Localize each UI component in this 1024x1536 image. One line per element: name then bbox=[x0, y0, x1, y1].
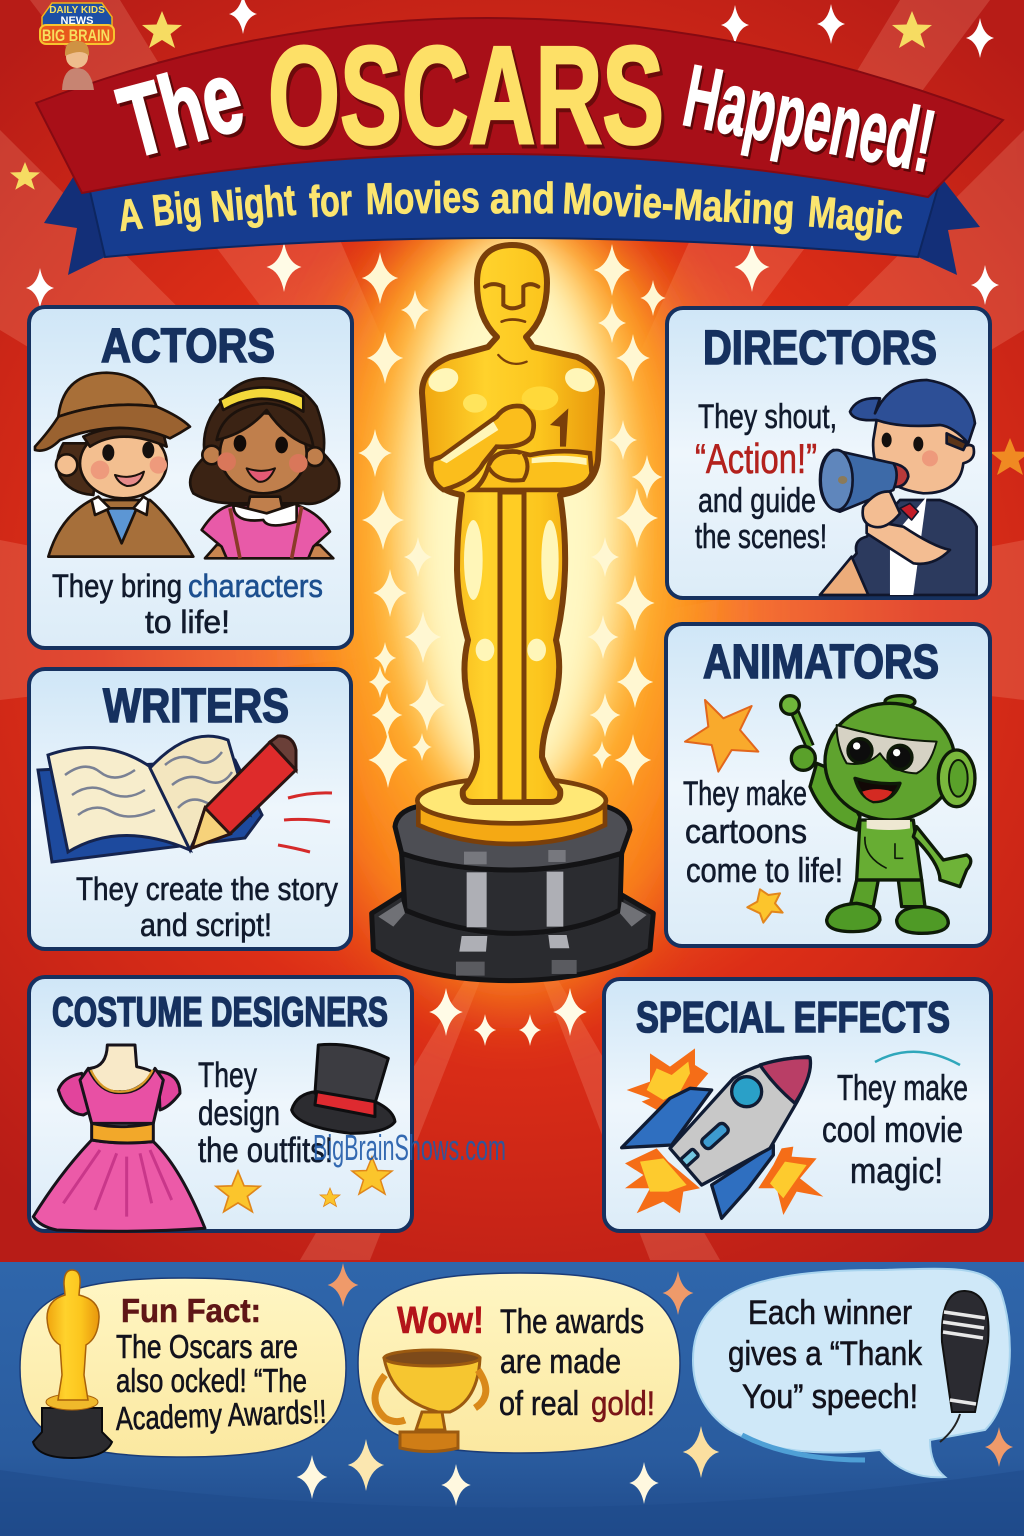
caption: They make bbox=[837, 1067, 968, 1108]
callout: fun fact: also ocked! “The bbox=[116, 1362, 307, 1399]
text: You” speech! bbox=[742, 1378, 918, 1416]
logo: Daily Kids News with Big Brain: NEWS bbox=[60, 15, 94, 27]
decorative stars bbox=[10, 0, 1024, 475]
icon: gold trophy bbox=[375, 1350, 486, 1452]
icon: boy with hat bbox=[35, 373, 193, 557]
icon: microphone bbox=[940, 1291, 989, 1442]
subtitle: Magic bbox=[806, 187, 905, 244]
heading: COSTUME DESIGNERS bbox=[52, 988, 388, 1035]
title banner ribbons bbox=[36, 18, 1003, 275]
panel: animators bbox=[666, 624, 990, 946]
title text: The bbox=[109, 40, 254, 179]
logo: Daily Kids News with Big Brain bbox=[40, 3, 114, 90]
sword bbox=[500, 492, 524, 802]
callout: wow: gold! bbox=[591, 1385, 655, 1423]
text: gives a “Thank bbox=[728, 1335, 923, 1373]
panel: directors bbox=[667, 308, 990, 598]
blue subtitle ribbon bbox=[44, 148, 980, 275]
panel: special effects bbox=[604, 979, 991, 1231]
subtitle: Night bbox=[209, 176, 298, 232]
caption: They bbox=[198, 1056, 257, 1095]
caption bbox=[822, 1067, 968, 1191]
bottom band bbox=[0, 1262, 1024, 1536]
title text bbox=[109, 18, 945, 194]
icon: stars bbox=[685, 700, 783, 923]
caption: and script! bbox=[140, 907, 272, 943]
golden glow behind statue bbox=[266, 200, 770, 1046]
caption: They make bbox=[683, 775, 807, 813]
text: Fun Fact: bbox=[121, 1292, 261, 1329]
icon: top hat bbox=[292, 1044, 395, 1133]
caption: and guide bbox=[698, 482, 816, 520]
title text: OSCARS bbox=[271, 22, 667, 177]
icon: director with megaphone bbox=[820, 380, 977, 595]
subtitle: Movie-Making bbox=[561, 174, 796, 235]
panel: actors bbox=[29, 307, 352, 648]
subtitle: and bbox=[490, 174, 555, 223]
text bbox=[728, 1294, 923, 1416]
callout: fun fact bbox=[20, 1270, 346, 1458]
caption: magic! bbox=[850, 1150, 943, 1191]
icon: red pencil bbox=[192, 736, 296, 848]
icon: girl with headband bbox=[190, 378, 339, 558]
caption: “Action!” bbox=[695, 435, 817, 482]
logo: Daily Kids News with Big Brain: BIG BRAIN bbox=[42, 26, 110, 45]
statue base bbox=[372, 807, 653, 981]
panel: writers bbox=[29, 669, 351, 949]
caption: characters bbox=[188, 568, 323, 604]
callout: wow: are made bbox=[500, 1343, 621, 1381]
caption bbox=[695, 398, 837, 556]
caption: They shout, bbox=[698, 398, 837, 436]
heading: WRITERS bbox=[103, 680, 289, 733]
caption bbox=[76, 871, 338, 943]
caption bbox=[683, 775, 843, 890]
caption: to life! bbox=[145, 604, 230, 640]
title text: OSCARS bbox=[268, 18, 664, 173]
caption: cartoons bbox=[685, 813, 807, 851]
callout: wow bbox=[358, 1273, 680, 1453]
caption: the scenes! bbox=[695, 518, 827, 556]
red title ribbon bbox=[36, 18, 1003, 197]
caption: They create the story bbox=[76, 871, 338, 907]
caption: design bbox=[198, 1094, 280, 1133]
subtitle bbox=[115, 173, 905, 244]
icon: open book bbox=[38, 736, 262, 862]
caption bbox=[198, 1056, 333, 1170]
subtitle: Big bbox=[150, 182, 204, 236]
heading: ACTORS bbox=[101, 320, 275, 373]
subtitle: A bbox=[115, 189, 145, 241]
callout: wow: of real bbox=[499, 1385, 579, 1423]
gold plinth bbox=[417, 778, 606, 844]
caption: come to life! bbox=[686, 852, 843, 890]
logo: Daily Kids News with Big Brain: DAILY KIDS bbox=[49, 5, 105, 16]
heading: ANIMATORS bbox=[703, 636, 939, 689]
text: Wow! bbox=[397, 1300, 484, 1342]
subtitle: for bbox=[308, 176, 353, 227]
icon: green robot bbox=[781, 696, 975, 933]
icon: small stars bbox=[216, 1157, 392, 1212]
callout: fun fact: The Oscars are bbox=[116, 1328, 298, 1365]
panel: costume designers bbox=[29, 977, 412, 1231]
subtitle: Movies bbox=[365, 173, 480, 224]
icon: pink dress bbox=[33, 1045, 205, 1231]
heading: DIRECTORS bbox=[703, 322, 937, 375]
callout: thank you speech bubble bbox=[693, 1269, 1010, 1477]
statue details bbox=[425, 284, 598, 661]
face bbox=[485, 284, 538, 364]
crossed arms bbox=[431, 406, 534, 490]
body silhouette bbox=[422, 245, 602, 802]
caption: They bring bbox=[52, 568, 182, 604]
text: Each winner bbox=[748, 1294, 912, 1332]
watermark: BigBrainShows.com bbox=[313, 1127, 506, 1168]
caption: cool movie bbox=[822, 1109, 963, 1150]
icon: rocket with explosions bbox=[622, 1048, 823, 1218]
caption: the outfits! bbox=[198, 1131, 333, 1170]
callout: wow: The awards bbox=[500, 1303, 644, 1341]
title text: The bbox=[112, 43, 257, 182]
caption bbox=[52, 568, 323, 640]
callout: fun fact: Academy Awards!! bbox=[115, 1393, 327, 1437]
Oscar statue bbox=[372, 245, 653, 981]
icon: mini oscar bbox=[33, 1270, 112, 1458]
